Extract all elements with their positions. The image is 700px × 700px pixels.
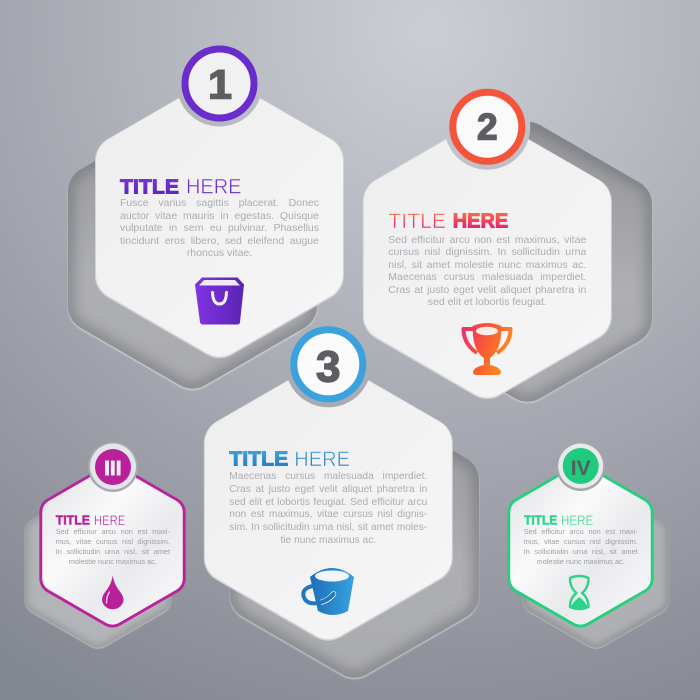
badge 2 [444, 84, 530, 170]
body text 3: non est maximus, vitae cursus nisl dignis- [229, 509, 427, 520]
title 2 [388, 209, 508, 233]
recessed hole 1 [68, 161, 318, 391]
body text IV: Sed efficitur arcu non est maxi- [524, 527, 638, 536]
title III: HERE [94, 513, 125, 528]
body text 1: rhoncus vitae. [187, 247, 252, 259]
body text 3: Maecenas cursus malesuada imperdiet. [229, 471, 427, 482]
card 2 [363, 119, 612, 399]
body text 3: Cras at justo eget velit aliquet pharetra in [229, 484, 427, 495]
body text 3: sim. In sollicitudin urna nisl, sit amet moles- [229, 522, 427, 533]
title 3 [229, 447, 350, 471]
title IV: TITLE [524, 513, 558, 528]
recessed hole 3 [230, 450, 480, 680]
body text III: Sed efficitur arcu non est maxi- [56, 527, 170, 536]
title 3: HERE [294, 447, 350, 471]
recessed hole IV [522, 519, 670, 649]
icon: trophy [464, 323, 510, 375]
body text 2: Maecenas cursus malesuada imperdiet. [388, 271, 586, 283]
body text 2: sed elit et lobortis feugiat. [428, 296, 547, 308]
recessed hole 2 [504, 122, 652, 404]
body text 1: auctor vitae mauris in egestas. Quisque [120, 210, 319, 222]
title 1: HERE [186, 175, 242, 199]
title III [56, 513, 125, 528]
card III [41, 465, 184, 626]
card IV [509, 465, 652, 626]
icon: bucket [303, 568, 354, 615]
body text 3 [229, 471, 427, 549]
badge III [88, 442, 138, 492]
panel 3: blue hexagon [204, 321, 479, 679]
card 3 [204, 361, 453, 641]
badge III: III [104, 458, 122, 480]
body text 1: Fusce varius sagittis placerat. Donec [120, 197, 319, 209]
panel IV: green hexagon [509, 442, 669, 649]
badge IV: IV [571, 457, 591, 480]
body text 3: sed elit et lobortis feugiat. Sed efficitur arcu [229, 497, 427, 508]
title 1: TITLE [120, 175, 179, 198]
body text 2: Cras at justo eget velit aliquet pharetra in [388, 284, 586, 296]
title IV: HERE [561, 513, 593, 528]
body text IV: In sollicitudin urna nisl, sit amet [524, 547, 638, 556]
body text III: In sollicitudin urna nisl, sit amet [56, 547, 170, 556]
body text III: mus, vitae cursus nisl dignissim. [56, 537, 170, 546]
body text 2: cursus nisl dignissim. In sollicitudin urna [388, 246, 586, 258]
title III: TITLE [56, 513, 90, 528]
body text 3: tie nunc maximus ac. [280, 535, 376, 546]
title 3: TITLE [229, 448, 288, 471]
card 1 [95, 78, 344, 358]
body text 1: vulputate in sem eu pulvinar. Phasellus [120, 222, 319, 234]
badge 3: 3 [316, 342, 341, 392]
panel 2: orange hexagon [363, 84, 652, 403]
icon: shopping bag [195, 278, 244, 324]
title IV [524, 513, 593, 528]
badge IV [556, 442, 605, 491]
title 2: TITLE [388, 209, 446, 233]
body text III: molestie nunc maximus ac. [69, 557, 157, 566]
body text 1 [120, 197, 319, 261]
body text IV: mus, vitae cursus nisl dignissim. [524, 537, 638, 546]
title 1 [120, 175, 242, 199]
body text 1: tincidunt eros libero, sed eleifend augue [120, 235, 319, 247]
recessed hole III [24, 515, 172, 650]
body text 2: nisl, sit amet molestie nunc maximus ac. [388, 259, 586, 271]
body text 2: Sed efficitur arcu non est maximus, vitae [388, 234, 586, 246]
body text IV: molestie nunc maximus ac. [537, 557, 625, 566]
panel 1: purple hexagon [68, 40, 344, 390]
title 2: HERE [453, 210, 508, 233]
body text 2 [388, 234, 586, 312]
body text III [56, 527, 170, 569]
body text IV [524, 527, 638, 569]
badge 1: 1 [208, 61, 232, 107]
icon: hourglass [570, 576, 588, 609]
badge 1 [176, 40, 262, 126]
panel III: magenta hexagon [25, 442, 184, 649]
badge 2: 2 [477, 106, 498, 147]
badge 3 [285, 321, 371, 407]
icon: drop [102, 576, 124, 609]
